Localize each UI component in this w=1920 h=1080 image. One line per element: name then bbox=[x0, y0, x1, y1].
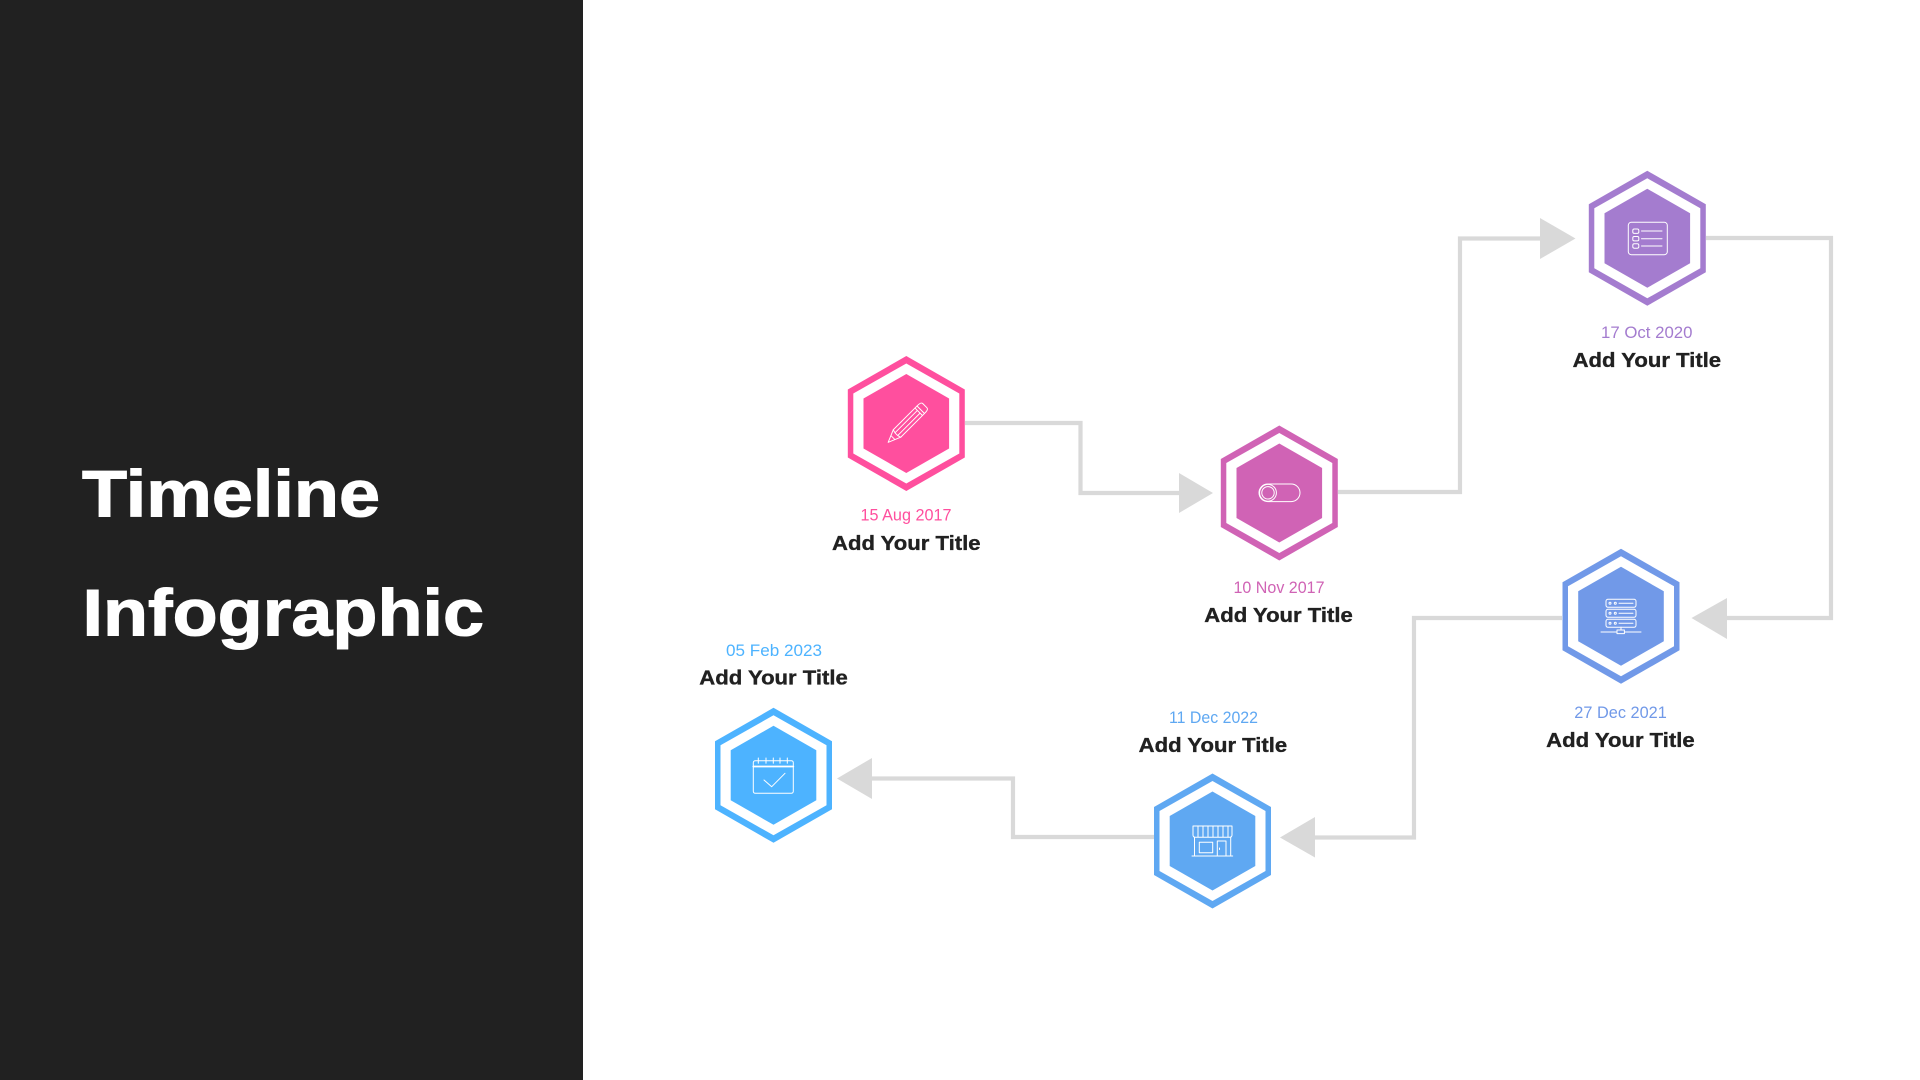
arrow: step 3 to step 4 bbox=[1692, 238, 1831, 639]
step title: Add Your Title bbox=[832, 533, 980, 555]
date: 17 Oct 2020 bbox=[1601, 324, 1692, 342]
step 4: 27 Dec 2021 bbox=[1546, 549, 1695, 752]
step title: Add Your Title bbox=[1204, 605, 1353, 627]
icon: toggle bbox=[1259, 484, 1300, 502]
step title: Add Your Title bbox=[1139, 735, 1287, 757]
date: 05 Feb 2023 bbox=[726, 642, 822, 660]
step title: Add Your Title bbox=[1546, 730, 1695, 752]
arrow: step 1 to step 2 bbox=[965, 423, 1213, 513]
arrow: step 2 to step 3 bbox=[1338, 218, 1576, 492]
panel: dark title background bbox=[0, 0, 583, 1080]
step title: Add Your Title bbox=[1573, 350, 1721, 372]
step 5: 11 Dec 2022 bbox=[1139, 709, 1287, 908]
icon: list bbox=[1628, 222, 1667, 255]
step title: Add Your Title bbox=[699, 668, 848, 690]
date: 15 Aug 2017 bbox=[860, 506, 952, 524]
step 2: 10 Nov 2017 bbox=[1204, 426, 1353, 627]
hexagon: light blue bbox=[715, 708, 832, 843]
arrow: step 5 to step 6 bbox=[837, 758, 1154, 837]
step 1: 15 Aug 2017 bbox=[832, 356, 980, 555]
title bbox=[82, 456, 484, 650]
date: 11 Dec 2022 bbox=[1169, 709, 1258, 727]
step 3: 17 Oct 2020 bbox=[1573, 171, 1721, 372]
hexagon: sky blue bbox=[1154, 774, 1271, 908]
title: Infographic bbox=[82, 576, 484, 650]
hexagon: periwinkle bbox=[1562, 549, 1680, 684]
hexagon: orchid bbox=[1221, 426, 1338, 560]
date: 27 Dec 2021 bbox=[1574, 704, 1667, 722]
arrow: step 4 to step 5 bbox=[1280, 618, 1562, 858]
title: Timeline bbox=[82, 456, 380, 530]
icon: pencil bbox=[884, 402, 929, 446]
icon: storefront bbox=[1192, 826, 1233, 856]
hexagon: pink bbox=[848, 356, 965, 491]
icon: server bbox=[1601, 599, 1641, 634]
icon: calendar check bbox=[753, 758, 793, 793]
hexagon: purple bbox=[1589, 171, 1706, 306]
step 6: 05 Feb 2023 bbox=[699, 642, 848, 843]
date: 10 Nov 2017 bbox=[1234, 579, 1324, 597]
